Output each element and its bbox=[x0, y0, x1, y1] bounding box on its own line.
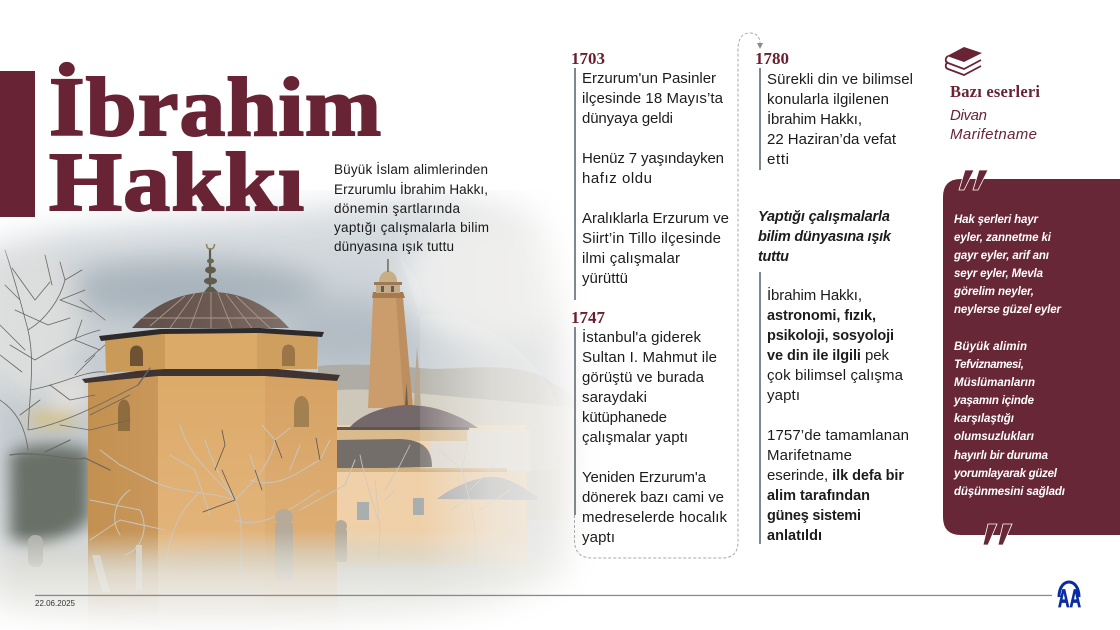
mosque photograph bbox=[0, 190, 620, 630]
quote text: olumsuzlukları bbox=[954, 431, 1034, 443]
text achievements: astronomi, fızık, bbox=[767, 308, 876, 324]
bare trees bbox=[0, 250, 510, 590]
text achievements: yaptı bbox=[767, 387, 800, 404]
subheading bbox=[758, 209, 892, 265]
text 1780: 22 Haziran’da vefat bbox=[767, 131, 897, 148]
text 1747: çalışmalar yaptı bbox=[582, 429, 688, 446]
text 1703: Aralıklarla Erzurum ve bbox=[582, 210, 729, 227]
text 1747: Sultan I. Mahmut ile bbox=[582, 349, 717, 366]
subheading: tuttu bbox=[758, 249, 789, 265]
text 1780: etti bbox=[767, 151, 789, 168]
text 1747: medreselerde hocalık bbox=[582, 509, 728, 526]
quote text: karşılaştığı bbox=[954, 413, 1014, 425]
subheading: Yaptığı çalışmalarla bbox=[758, 209, 890, 225]
quote text: yaşamın içinde bbox=[953, 395, 1035, 407]
text achievements: güneş sistemi bbox=[767, 508, 861, 524]
intro text: Erzurumlu İbrahim Hakkı, bbox=[334, 182, 488, 197]
works list: Marifetname bbox=[950, 126, 1037, 143]
text 1747: Yeniden Erzurum'a bbox=[582, 469, 707, 486]
text 1703: Siirt’in Tillo ilçesinde bbox=[582, 230, 721, 247]
sky bbox=[0, 190, 560, 586]
icon: closing quotation mark bbox=[983, 524, 1012, 545]
text 1747: kütüphanede bbox=[582, 409, 667, 426]
icon: AA logo bbox=[1058, 582, 1081, 613]
text achievements: alim tarafından bbox=[767, 488, 870, 504]
quote text: Tefviznamesi, bbox=[954, 359, 1024, 371]
text achievements: Marifetname bbox=[767, 447, 852, 464]
text 1703: Erzurum'un Pasinler bbox=[582, 70, 716, 87]
annex building bbox=[337, 383, 537, 565]
works heading: Bazı eserleri bbox=[950, 82, 1040, 101]
intro text bbox=[334, 162, 489, 254]
text 1747: İstanbul'a giderek bbox=[582, 328, 702, 346]
small far minaret bbox=[414, 346, 421, 405]
quote text: Hak şerleri hayr bbox=[954, 214, 1039, 226]
quote text: neylerse güzel eyler bbox=[954, 304, 1062, 316]
icon: books bbox=[946, 47, 982, 75]
timeline line 1703 bbox=[574, 68, 576, 300]
date: 22.06.2025 bbox=[35, 599, 76, 608]
intro text: dönemin şartlarında bbox=[334, 201, 460, 216]
title accent bar bbox=[0, 71, 35, 217]
foreground fog bbox=[0, 534, 524, 630]
year 1747: 1747 bbox=[571, 308, 606, 327]
icon: opening quotation mark bbox=[959, 170, 988, 190]
text achievements: 1757’de tamamlanan bbox=[767, 427, 909, 444]
gravestones bbox=[28, 509, 347, 592]
text 1747 bbox=[582, 328, 728, 546]
text 1747: yaptı bbox=[582, 529, 615, 546]
intro text: yaptığı çalışmalarla bilim bbox=[334, 220, 489, 235]
title bbox=[49, 61, 382, 229]
timeline line 1780 bbox=[759, 68, 761, 170]
quote text: düşünmesini sağladı bbox=[954, 486, 1065, 498]
intro text: Büyük İslam alimlerinden bbox=[334, 162, 488, 177]
text 1780 bbox=[767, 71, 913, 168]
text 1703: ilçesinde 18 Mayıs’ta bbox=[582, 90, 724, 107]
text 1747: görüştü ve burada bbox=[582, 369, 705, 386]
title: Hakkı bbox=[49, 136, 305, 229]
left foliage bbox=[10, 375, 90, 545]
text 1747: dönerek bazı cami ve bbox=[582, 489, 724, 506]
timeline column 2 bbox=[755, 49, 913, 544]
text achievements: eserinde, ilk defa bir bbox=[767, 467, 904, 484]
minaret bbox=[368, 259, 413, 408]
text 1747: saraydaki bbox=[582, 389, 647, 406]
dome bbox=[132, 292, 289, 328]
quote text: Büyük alimin bbox=[954, 341, 1027, 353]
text 1780: Sürekli din ve bilimsel bbox=[767, 71, 913, 88]
year 1703: 1703 bbox=[571, 49, 605, 68]
main tomb body bbox=[82, 244, 340, 630]
footer rule bbox=[35, 595, 1052, 596]
finial bbox=[209, 248, 211, 288]
title: İbrahim bbox=[49, 61, 382, 154]
intro text: dünyasına ışık tuttu bbox=[334, 239, 454, 254]
windows bbox=[130, 346, 143, 366]
quote text: Müslümanların bbox=[954, 377, 1035, 389]
text achievements bbox=[767, 286, 909, 544]
text achievements: psikoloji, sosyoloji bbox=[767, 328, 894, 344]
quote text: hayırlı bir duruma bbox=[954, 450, 1049, 462]
text 1703: yürüttü bbox=[582, 270, 628, 287]
works list: Divan bbox=[950, 107, 987, 124]
quote text: eyler, zannetme ki bbox=[954, 232, 1052, 244]
text achievements: anlatıldı bbox=[767, 528, 822, 544]
timeline line achievements bbox=[759, 272, 761, 544]
quote text: görelim neyler, bbox=[953, 286, 1034, 298]
dashed timeline connector bbox=[574, 33, 763, 558]
quote text: seyr eyler, Mevla bbox=[954, 268, 1044, 280]
text achievements: çok bilimsel çalışma bbox=[767, 367, 904, 384]
subheading: bilim dünyasına ışık bbox=[758, 229, 892, 245]
panel: quote bbox=[943, 170, 1120, 545]
washed-out right edge bbox=[426, 210, 586, 573]
quote text: yorumlayarak güzel bbox=[953, 468, 1058, 480]
text achievements: İbrahim Hakkı, bbox=[767, 286, 862, 304]
quote text bbox=[953, 214, 1065, 498]
quote text: gayr eyler, arif anı bbox=[953, 250, 1049, 262]
text achievements: ve din ile ilgili pek bbox=[767, 347, 890, 364]
low bushes bbox=[23, 542, 460, 585]
text 1703: hafız oldu bbox=[582, 170, 652, 187]
hills bbox=[318, 364, 554, 405]
timeline line 1747 bbox=[574, 327, 576, 515]
text 1703: ilmi çalışmalar bbox=[582, 250, 680, 267]
text 1780: konularla ilgilenen bbox=[767, 91, 889, 108]
text 1703: Henüz 7 yaşındayken bbox=[582, 150, 724, 167]
works list bbox=[950, 107, 1037, 143]
icon: AA logo: AA bbox=[1058, 585, 1081, 613]
text 1703 bbox=[582, 70, 729, 287]
text 1703: dünyaya geldi bbox=[582, 110, 673, 127]
year 1780: 1780 bbox=[755, 49, 789, 68]
text 1780: İbrahim Hakkı, bbox=[767, 110, 862, 128]
timeline column 1 bbox=[571, 49, 729, 546]
